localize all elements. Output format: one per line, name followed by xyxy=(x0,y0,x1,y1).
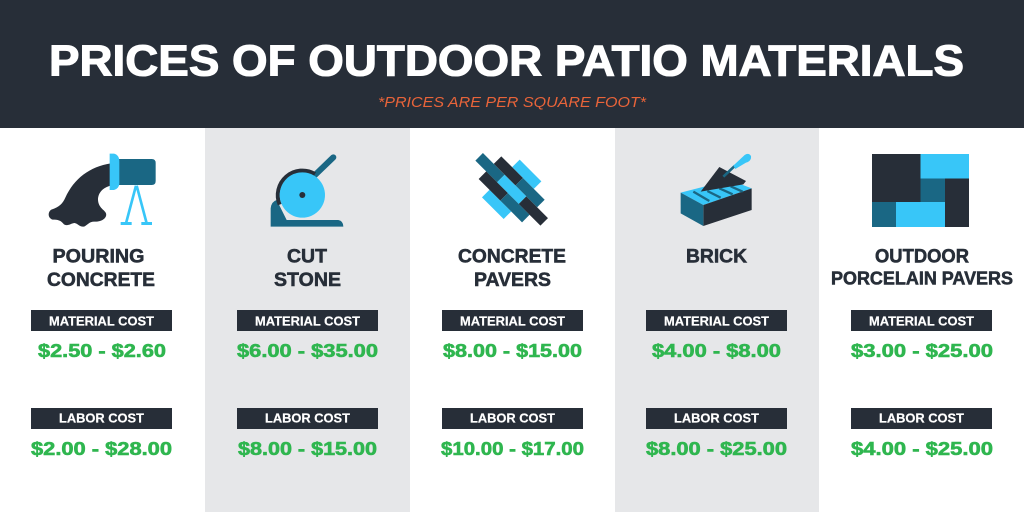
icon: concrete pouring from pipe xyxy=(49,154,156,227)
column: brick: $4.00 - $8.00 xyxy=(652,341,781,361)
material cost xyxy=(237,310,378,331)
column: brick: LABOR COST xyxy=(674,410,759,426)
heading: CONCRETE xyxy=(458,246,566,268)
icon: brick and trowel xyxy=(681,154,752,226)
column: cut stone: $8.00 - $15.00 xyxy=(238,439,377,459)
labor cost xyxy=(237,408,378,429)
column: outdoor porcelain pavers: $3.00 - $25.00 xyxy=(851,341,993,361)
column: cut stone: MATERIAL COST xyxy=(255,314,360,328)
column: concrete pavers: PAVERS xyxy=(474,269,551,291)
header banner xyxy=(0,0,1024,128)
column: cut stone xyxy=(237,157,378,459)
material cost xyxy=(442,310,583,331)
icon: stone saw xyxy=(271,157,343,227)
heading: POURING xyxy=(52,246,144,268)
column: pouring concrete: MATERIAL COST xyxy=(49,314,154,328)
column: concrete pavers: $8.00 - $15.00 xyxy=(443,341,582,361)
column: outdoor porcelain pavers: $4.00 - $25.00 xyxy=(851,439,993,459)
column: concrete pavers: $10.00 - $17.00 xyxy=(441,439,584,459)
column: outdoor porcelain pavers xyxy=(831,154,1013,459)
column: cut stone: STONE xyxy=(274,269,341,291)
labor cost xyxy=(31,408,172,429)
column: brick: $8.00 - $25.00 xyxy=(646,439,787,459)
column: pouring concrete: $2.00 - $28.00 xyxy=(31,439,172,459)
heading: OUTDOOR xyxy=(875,246,969,268)
labor cost xyxy=(646,408,787,429)
column: brick xyxy=(646,154,787,459)
heading: CUT xyxy=(287,246,327,268)
column: outdoor porcelain pavers: LABOR COST xyxy=(879,410,964,426)
labor cost xyxy=(851,408,992,429)
column: pouring concrete: LABOR COST xyxy=(59,410,144,426)
icon: woven pavers xyxy=(460,138,563,241)
subtitle: *PRICES ARE PER SQUARE FOOT* xyxy=(378,95,648,111)
heading: BRICK xyxy=(686,246,747,268)
column: cut stone: LABOR COST xyxy=(265,410,350,426)
material cost xyxy=(851,310,992,331)
column: outdoor porcelain pavers: MATERIAL COST xyxy=(869,314,974,328)
column: pouring concrete: $2.50 - $2.60 xyxy=(38,341,166,361)
labor cost xyxy=(442,408,583,429)
column: concrete pavers: LABOR COST xyxy=(470,410,555,426)
column: pouring concrete xyxy=(31,154,172,459)
column: outdoor porcelain pavers: PORCELAIN PAVERS xyxy=(831,268,1013,288)
material cost xyxy=(31,310,172,331)
column: brick: MATERIAL COST xyxy=(664,314,769,328)
icon: porcelain tiles xyxy=(872,154,969,227)
column: concrete pavers: MATERIAL COST xyxy=(460,314,565,328)
material cost xyxy=(646,310,787,331)
column: pouring concrete: CONCRETE xyxy=(47,269,155,291)
column: cut stone: $6.00 - $35.00 xyxy=(237,341,378,361)
column: concrete pavers xyxy=(441,138,584,459)
title: PRICES OF OUTDOOR PATIO MATERIALS xyxy=(49,36,964,86)
